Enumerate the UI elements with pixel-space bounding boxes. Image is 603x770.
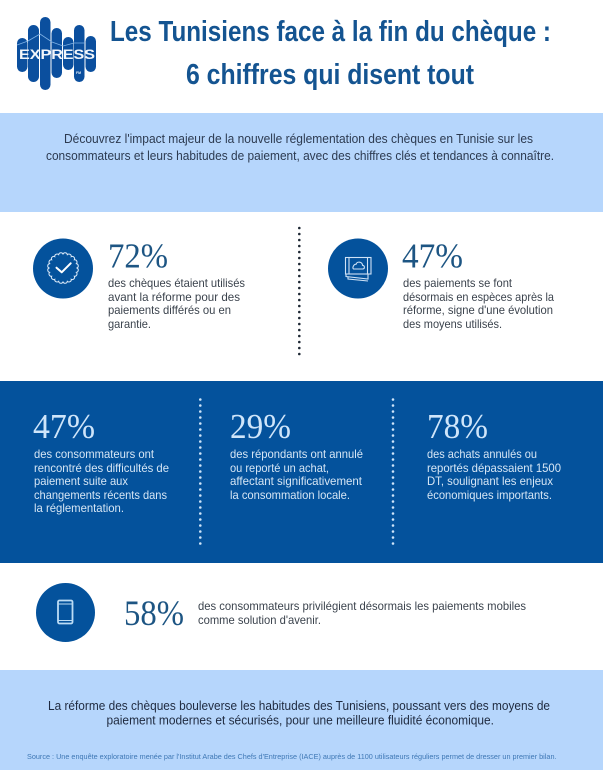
intro text: [46, 132, 554, 163]
logo: Express FM: EXPRESS: [19, 47, 95, 62]
title: [110, 16, 551, 91]
stat: 47% cash payments: des paiements se font: [403, 276, 513, 290]
stat: 47% cash payments: 47%: [402, 236, 463, 276]
stat: 72% cheques: 72%: [108, 236, 168, 276]
stat: 29% respondents: ou reporté un achat,: [230, 461, 329, 475]
stat: 47% consumers: paiement suite aux: [34, 474, 128, 488]
source note: Source : Une enquête exploratoire menée par l'Institut Arabe des Chefs d'Entreprise (IACE) auprès de 1100 utilisateurs réguliers permet de dresser un premier bilan.: [27, 752, 556, 761]
stat: 47% cash payments: réforme, signe d'une évolution: [403, 303, 553, 317]
stat: 29% respondents: affectant significativement: [230, 474, 363, 488]
dotted divider: [392, 400, 394, 545]
stat: 58% mobile payments: [124, 593, 526, 633]
stat: 58% mobile payments: des consommateurs privilégient désormais les paiements mobiles: [198, 599, 526, 613]
stat: 72% cheques: garantie.: [108, 317, 151, 331]
stat: 29% respondents: la consommation locale.: [230, 488, 350, 502]
panel: conclusion band: [0, 670, 603, 770]
logo: Express FM: [17, 17, 96, 90]
intro text: consommateurs et leurs habitudes de paiement, avec des chiffres clés et tendances à connaître.: [46, 149, 554, 163]
panel: intro band: [0, 113, 603, 212]
conclusion text: paiement modernes et sécurisés, pour une meilleure fluidité économique.: [106, 714, 494, 728]
stat: 47% cash payments: des moyens utilisés.: [403, 317, 502, 331]
stat: 72% cheques: [108, 236, 245, 331]
dotted divider: [298, 228, 301, 355]
stat: 58% mobile payments: 58%: [124, 593, 184, 633]
stat: 78% purchases: économiques importants.: [427, 488, 552, 502]
icon: banknotes: [328, 238, 388, 298]
stat: 47% consumers: des consommateurs ont: [34, 447, 155, 461]
stat: 78% purchases: reportés dépassaient 1500: [427, 461, 561, 475]
stat: 78% purchases: 78%: [427, 407, 488, 446]
intro text: Découvrez l'impact majeur de la nouvelle réglementation des chèques en Tunisie sur les: [64, 132, 533, 146]
stat: 29% respondents: [230, 407, 363, 502]
stat: 78% purchases: [427, 407, 561, 502]
logo: Express FM: FM: [76, 71, 81, 75]
icon: verified check badge: [33, 238, 93, 298]
stat: 72% cheques: paiements différés ou en: [108, 303, 231, 317]
icon: smartphone: [36, 583, 95, 642]
stat: 29% respondents: des répondants ont annulé: [230, 447, 363, 461]
stat: 29% respondents: 29%: [230, 407, 291, 446]
conclusion text: La réforme des chèques bouleverse les habitudes des Tunisiens, poussant vers des moyens de: [48, 699, 550, 713]
stat: 58% mobile payments: comme solution d'avenir.: [198, 613, 321, 627]
dotted divider: [199, 400, 202, 545]
title: 6 chiffres qui disent tout: [186, 59, 474, 91]
panel: dark statistics band: [0, 381, 603, 563]
stat: 47% cash payments: désormais en espèces après la: [403, 290, 554, 304]
stat: 72% cheques: avant la réforme pour des: [108, 290, 240, 304]
stat: 47% consumers: 47%: [33, 407, 95, 446]
stat: 78% purchases: DT, soulignant les enjeux: [427, 474, 553, 488]
stat: 47% consumers: la réglementation.: [34, 501, 124, 515]
stat: 47% consumers: changements récents dans: [34, 488, 167, 502]
stat: 78% purchases: des achats annulés ou: [427, 447, 537, 461]
stat: 47% consumers: [33, 407, 169, 515]
conclusion text: [48, 699, 550, 728]
stat: 47% consumers: rencontré des difficultés de: [34, 461, 169, 475]
stat: 72% cheques: des chèques étaient utilisés: [108, 276, 245, 290]
stat: 47% cash payments: [402, 236, 554, 331]
